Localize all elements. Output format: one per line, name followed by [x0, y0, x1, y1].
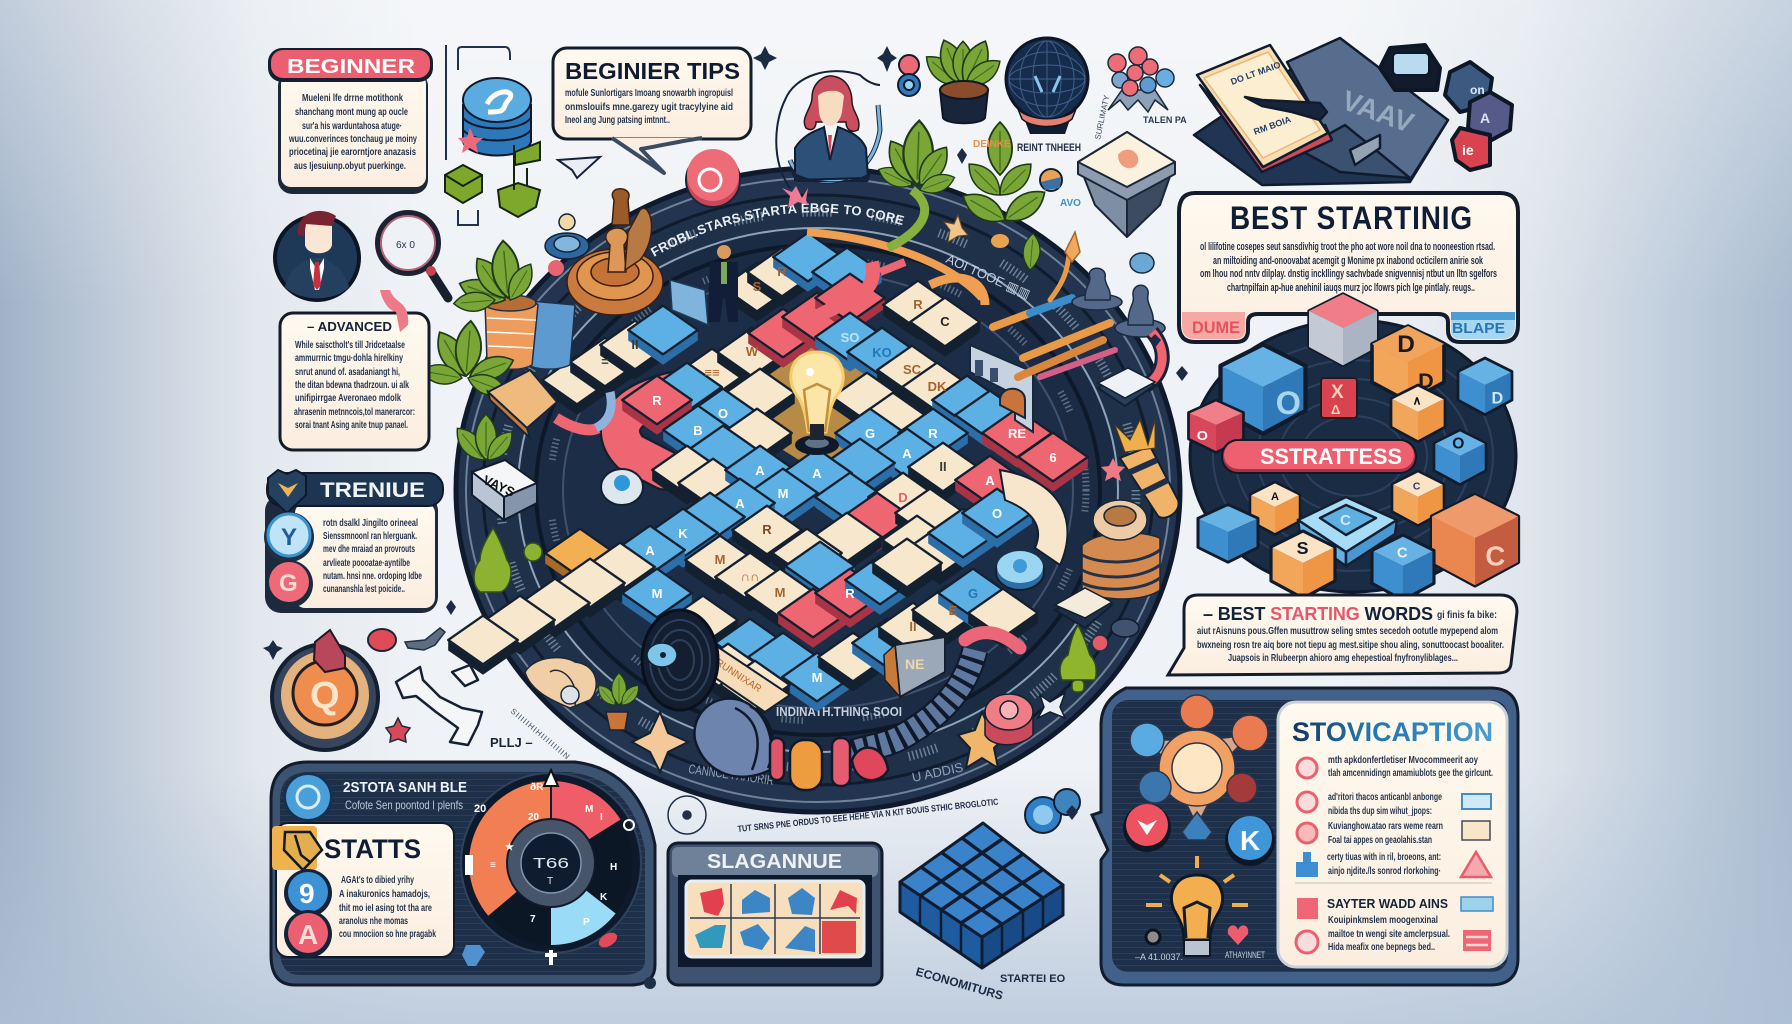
large left plant: [453, 240, 539, 313]
stats text: A inakuronics hamadojs,: [339, 889, 430, 900]
sayter text: mailtoe tn wengi site amclerpsual.: [1328, 929, 1450, 940]
small stray labels: AVO: [1060, 198, 1081, 209]
trenue text: cunananshla lest poicide..: [323, 584, 405, 595]
tile letters: [601, 264, 1057, 685]
words text: gi finis fa bike:: [1437, 610, 1497, 621]
icon: bottom charm tokens: [1025, 789, 1080, 833]
panel: stovication: [1092, 688, 1518, 985]
tile letters: R: [928, 426, 938, 441]
die: orange d: [1372, 326, 1444, 402]
tile letters: D: [898, 490, 908, 505]
tile letters: A: [645, 543, 655, 558]
tile letters: M: [812, 670, 822, 685]
panel: best starting words: [1168, 595, 1517, 675]
castle: [970, 345, 1033, 432]
icon: paper plane: [558, 157, 600, 178]
die: cream orange left: A: [1271, 491, 1279, 503]
die: red: O: [1197, 429, 1208, 443]
small potted plant: [594, 673, 643, 730]
icon: businessman: [275, 211, 359, 300]
tile letters: S: [753, 279, 762, 294]
stovication text: ad'ritori thacos anticanbl anbonge: [1328, 792, 1442, 803]
left captions: [1135, 950, 1265, 962]
beginner text: wuu.converinces tonchaug µe moiny: [288, 134, 417, 145]
icon: blue k button: K: [1240, 825, 1260, 856]
tile letters: C: [940, 314, 950, 329]
central light bulb: [791, 352, 843, 455]
rope: [840, 632, 1020, 760]
tab: dume: [1182, 312, 1245, 339]
panel: beginner tips: [553, 48, 751, 173]
icon: hex tokens: A: [1480, 110, 1490, 126]
orange star: [958, 712, 1007, 768]
icon: open books: RM BOIA: [1252, 114, 1293, 137]
icon: yellow tag: [272, 826, 322, 870]
tile letters: KO: [872, 345, 892, 360]
best starting text: an miltoiding and-onoovabat acemgit g Monime px inabond octicilern anirie sok: [1213, 255, 1484, 267]
tile letters: SC: [903, 362, 922, 377]
board rim text: top: FROBL.STARS.STARTA EBGE TO CORE: [650, 203, 904, 257]
die: cream orange top: [1391, 385, 1445, 442]
icon: magnifying glass: [378, 213, 448, 298]
icon: blue nine: [284, 869, 332, 917]
third left plant: [450, 414, 518, 466]
donut chart: [461, 770, 641, 965]
trenue text: [323, 518, 422, 595]
icon: orange target button: Q: [310, 675, 340, 717]
beginner text: aus Ijesuiunp.obyut puerkinge.: [294, 161, 406, 172]
chart tick labels: 20: [474, 803, 486, 815]
icon: medallion hub: [1130, 695, 1268, 840]
die: cream orange lower: [1392, 471, 1444, 526]
icon: red g: G: [279, 570, 298, 597]
advanced text: While saisctholt's till Jridcetaalse: [295, 340, 405, 351]
white card tile: [1098, 368, 1155, 406]
icon: red button: [1123, 804, 1171, 852]
icon: ball: [1040, 169, 1062, 191]
board rim text: bottom: INDINATH.THING SOOI: [776, 704, 902, 719]
die: red: [1188, 400, 1244, 452]
board rim text: lower right: U ADDIS: [911, 759, 965, 785]
icon: dot: [644, 977, 656, 989]
long runner tile: RUNNIXAR: [713, 657, 763, 695]
woman portrait: [776, 71, 880, 188]
best starting text: ol lilifotine cosepes seut sansdivhig troot the pho aot wore noil dna to nooneestion rtsad.: [1200, 241, 1495, 253]
icon: idea bulb: [1146, 856, 1248, 956]
die: blue right: [1458, 358, 1512, 415]
die: blue c: C: [1397, 545, 1408, 561]
small tile lower right: [1055, 588, 1112, 628]
tile letters: M: [775, 585, 785, 600]
icon: hex tokens: ie: [1462, 142, 1474, 158]
heading pill: beginner: [268, 48, 433, 82]
trenue text: Sienssmnoonl ran hlerguank.: [323, 531, 417, 542]
heading: stats subtitle: Cofote Sen poontod I plenfs: [345, 798, 463, 812]
tile letters: R: [762, 522, 772, 537]
advanced text: sorai tnant Asing anite tnup panael.: [295, 420, 408, 431]
chart centre value: T66: [533, 855, 569, 872]
icon: red a: A: [298, 919, 318, 950]
sayter text: Kouipinkmslem moogenxinal: [1328, 915, 1438, 926]
best starting text: chartnpilfain ap-hue anehinil iauqs murz joc lfowrs pich lge pintlaly. reugs..: [1227, 282, 1475, 294]
coin stack: [1082, 500, 1160, 599]
icon: coin stack: [458, 78, 531, 156]
grey end block: NE: [905, 656, 924, 672]
icon: blue y: Y: [281, 524, 297, 551]
trenue text: rotn dsalkl Jingilto orineeal: [323, 518, 418, 529]
panel: best starting: [1179, 193, 1518, 342]
panel: strategies dice: [1188, 294, 1518, 600]
tips text: onmslouifs mne.garezy ugit tracylyine aid: [565, 102, 733, 113]
die: blue flat left: [1198, 504, 1258, 562]
red curved path: [620, 392, 672, 470]
heading: stovication: STOVICAPTION: [1292, 717, 1493, 747]
card: red x: [1321, 378, 1357, 418]
die: light blue stepped: [1298, 497, 1397, 566]
left tree: [474, 528, 542, 592]
icon: green cubes and flag: [445, 142, 540, 217]
die: big orange: [1432, 495, 1518, 585]
cream card: [1278, 702, 1507, 967]
small stray labels: SURLIMATY: [1093, 94, 1111, 140]
chess piece platform: [567, 189, 663, 315]
die: blue o: O: [1452, 436, 1464, 453]
second left plant: [420, 320, 517, 401]
small stray labels: [509, 94, 1187, 1003]
icon: open books: [1194, 38, 1448, 185]
heading: beginner tips: BEGINIER TIPS: [565, 58, 740, 84]
tile letters: G: [865, 426, 875, 441]
icon: red star small: [386, 718, 410, 742]
heading pill: beginner: BEGINNER: [287, 56, 416, 78]
pill: strategies: [1222, 440, 1416, 473]
tile letters: A: [755, 463, 765, 478]
small stray labels: ECONOMITURS: [914, 964, 1005, 1003]
die: grey top: [1309, 294, 1377, 365]
centre glow: [700, 320, 925, 470]
stovication text: Kuvianghow.atao rars weme rearn: [1328, 821, 1443, 832]
panel: slagannue map: [668, 843, 882, 985]
words text: [1197, 610, 1504, 664]
die: orange d: D: [1418, 368, 1434, 393]
tile letters: A: [902, 446, 912, 461]
trenue text: mev dhe mraiad an provrouts: [323, 544, 415, 555]
icon: device outline: [446, 45, 510, 225]
tile letters: II: [939, 459, 947, 474]
chart tick labels: 20: [528, 812, 540, 823]
stats card: [272, 823, 454, 958]
icon: red g: [265, 560, 313, 608]
icon: shield: [268, 470, 306, 513]
icon: blue nine: 9: [299, 878, 315, 909]
round blue game piece: [545, 214, 589, 259]
heading: best starting: BEST STARTINIG: [1230, 200, 1473, 236]
tips text: Ineol ang Jung patsing imtnnt..: [565, 115, 670, 126]
die: blue right: D: [1491, 389, 1503, 407]
tile letters: A: [812, 466, 822, 481]
label: plus tag: PLLJ –: [490, 735, 533, 750]
icon: berries: [1108, 47, 1174, 112]
icon: globe: [1006, 38, 1088, 134]
beginner text: Mueleni lfe drrne motithonk: [302, 93, 403, 104]
tile letters: DK: [928, 379, 947, 394]
chart tick labels: I: [600, 812, 603, 823]
pink star on board: [1101, 458, 1125, 481]
paint brushes: [993, 232, 1115, 377]
words text: Juapsois in Rlubeerpn ahioro amg ehepestioal fnyfronyliblages...: [1228, 653, 1458, 664]
icon: pedestal: [1078, 132, 1175, 237]
pink and blue hook tube: [556, 392, 611, 430]
icon: open books: DO LT MAIO: [1229, 60, 1282, 87]
tile letters: G: [968, 586, 978, 601]
die: big blue: O: [1276, 385, 1301, 421]
tab: blape: BLAPE: [1452, 320, 1505, 337]
grey end block: [884, 637, 945, 697]
chart tick labels: K: [600, 892, 608, 903]
icon: plant pot: [920, 36, 1005, 123]
stovication text: [1327, 755, 1493, 877]
icon: hex tokens: on: [1470, 83, 1485, 97]
tile letters: M: [715, 552, 725, 567]
small tile box: VAYS: [481, 472, 517, 500]
tile letters: ≡≡: [704, 365, 720, 380]
advanced text: ahrasenin metnncois,tol manerarcor:: [294, 407, 415, 418]
die: blue o: [1434, 430, 1486, 485]
path tiles: [448, 233, 1088, 720]
shell: [525, 658, 596, 708]
board rim text: lower left: CANNCE FAHORIR: [688, 761, 775, 788]
die: light blue stepped: C: [1340, 512, 1351, 529]
tile letters: M: [652, 586, 662, 601]
trenue text: nutam. hnsi nne. ordoping Idbe: [323, 571, 422, 582]
heading: stats subtitle: [343, 779, 467, 812]
pill: strategies: SSTRATTESS: [1260, 444, 1402, 469]
small stray labels: TALEN PA: [1143, 115, 1187, 125]
small stray labels: TUT SRNS PNE ORDUS TO EEE HEHE VIA N KIT BOUIS STHIC BROGLOTIC: [737, 797, 999, 834]
open book on board: [488, 370, 557, 438]
sayter text: Hida meafix one bepnegs bed..: [1328, 942, 1435, 953]
spiral disc: [642, 610, 718, 710]
die: cream orange top: ∧: [1413, 393, 1421, 407]
advanced text: ammurrnic tmgu·dohla hirelkiny: [295, 353, 403, 364]
tile letters: B: [693, 423, 703, 438]
heading: best starting words: – BEST STARTING WORDS: [1203, 604, 1433, 624]
map card: [686, 881, 864, 957]
beginner text: shanchang mont mung ap oucle: [295, 107, 408, 118]
panel: stats: [271, 762, 655, 985]
big leaves top: [875, 120, 957, 198]
advanced text: [294, 340, 415, 431]
trenue text: arvlieate poooatae·ayntilbe: [323, 558, 410, 569]
elephant blob and beads: [694, 698, 888, 790]
stovication text: mth apkdonfertletiser Mvocommeerit aoy: [1328, 755, 1478, 766]
small stray labels: SIIIIIHIHIIIIIIIIIN: [509, 707, 572, 762]
left captions: –A 41.0037.: [1135, 952, 1183, 962]
tile letters: R: [845, 586, 855, 601]
icon: blue k button: [1225, 816, 1275, 866]
panel: beginner: [268, 48, 433, 194]
pink star on rim: [782, 186, 808, 208]
sayter text: [1328, 915, 1450, 953]
icon: grey dot: [1146, 930, 1160, 944]
icon: pin: [898, 55, 920, 96]
tile letters: 6: [1049, 450, 1057, 465]
red cylinder: [985, 694, 1033, 745]
stats text: AGAt's to dibied yrihy: [341, 875, 414, 886]
tile letters: =: [601, 354, 609, 369]
left captions: ATHAYINNET: [1225, 950, 1265, 960]
best starting text: om lhou nod nntv dilplay. dnstig inckllingy sachvbade snigvennisj ntbut un lltn sgelfors: [1200, 268, 1497, 280]
words text: aiut rAisnuns pous.Gffen musuttrow seling smtes secedoh ootutle mypepend alom: [1197, 626, 1498, 637]
tile letters: R: [652, 393, 662, 408]
arrow: [396, 665, 482, 745]
red dot: [548, 260, 564, 276]
pink hose: [1145, 332, 1162, 386]
die: blue c: [1372, 535, 1434, 600]
die: cream orange lower: C: [1413, 482, 1421, 493]
icon: heart: [1228, 925, 1248, 945]
panel: trenue: [264, 470, 443, 613]
advanced text: unifipirrgae Averonaeo mdolk: [295, 393, 401, 404]
tile letters: A: [985, 473, 995, 488]
stats text: thit mo ieI asing tot tha are: [339, 903, 432, 914]
words text: bwxneing rosn tre aiq bore not tiepu ag mest.sitipe shou aling, sonuttoocast booaliter.: [1197, 640, 1504, 651]
blue round token: [996, 551, 1044, 590]
chart centre sub value: T: [547, 876, 553, 887]
card: red x: X: [1331, 382, 1344, 403]
tile letters: A: [735, 496, 745, 511]
best starting text: [1200, 241, 1497, 294]
heading: advanced: – ADVANCED: [307, 319, 392, 334]
beginner text: sur'a his warduntahosa atuge·: [302, 121, 402, 132]
decorative sparkles: [263, 46, 1188, 820]
tile letters: E: [949, 603, 958, 618]
stats text: aranolus nhe momas: [339, 916, 408, 927]
tile letters: O: [718, 406, 728, 421]
tile letters: K: [678, 526, 688, 541]
tile letters: RE: [1008, 426, 1026, 441]
tile letters: O: [992, 506, 1002, 521]
tab: dume: DUME: [1192, 318, 1240, 337]
heading: stats subtitle: 2STOTA SANH BLE: [343, 779, 467, 796]
small stray labels: DEINKE: [973, 139, 1011, 150]
chart tick labels: [474, 781, 617, 928]
die: cream orange left: [1250, 482, 1300, 534]
grey chess pieces: [1072, 253, 1165, 337]
icon: red a: [284, 910, 332, 958]
cream star: [632, 712, 688, 772]
business figure: [670, 245, 738, 325]
orange cups and blue cloth: [484, 295, 575, 369]
stovication text: nibida ths dup sim wihut_jpops:: [1328, 806, 1432, 817]
heading: slagannue: SLAGANNUE: [707, 851, 842, 873]
tips text: mofule Sunlortigars Imoang snowarbh ingropuisl: [565, 88, 733, 99]
chart tick labels: M: [585, 804, 593, 815]
icon: blue dial: [283, 772, 333, 822]
tile letters: ∩∩: [741, 569, 759, 584]
chart tick labels: ★: [505, 842, 514, 853]
stovication text: tlah amcennidingn amamiublots gee the girlcunt.: [1328, 768, 1493, 779]
card: red x: Δ: [1331, 402, 1340, 417]
striped finger piece: [1115, 420, 1179, 518]
icon: red oval and bird: [368, 628, 445, 651]
icon: hex tokens: [1380, 45, 1512, 170]
white star: [1038, 693, 1065, 718]
pink branch and orange cable: [807, 190, 985, 320]
left list icons: [1296, 758, 1318, 953]
advanced text: snrut anund of. asadaniangt hi,: [295, 367, 400, 378]
icon: blue y: [264, 512, 314, 562]
right list icons: [1461, 794, 1493, 951]
tab: blape: [1451, 312, 1515, 339]
die: orange s: [1271, 531, 1335, 598]
tile letters: R: [913, 297, 923, 312]
round items right of tree: [1092, 619, 1139, 651]
icon: open books: VAAV: [1338, 85, 1418, 139]
red seal token: [686, 149, 740, 207]
tile letters: W: [746, 344, 759, 359]
cream curved path end: [1000, 470, 1068, 565]
tips text: [565, 88, 733, 126]
tile letters: SO: [841, 330, 859, 345]
tile letters: M: [778, 486, 788, 501]
die: orange d: D: [1397, 331, 1415, 358]
stats text: cou mnociion so hne pragabk: [339, 929, 436, 940]
icon: chip sketch: [668, 796, 706, 834]
beginner text: [288, 93, 417, 172]
icon: magnifying glass: 6x 0: [396, 240, 415, 251]
stats text: [339, 875, 436, 940]
orange star near leaves: [944, 215, 968, 242]
chart tick labels: ≡: [490, 860, 496, 871]
icon: blue cube grid: [900, 823, 1063, 968]
icon: blue puzzle: [462, 945, 485, 966]
advanced text: the ditan bdewna thadrzoun. ui alk: [295, 380, 409, 391]
main game board: [430, 70, 1182, 814]
tile letters: R: [777, 264, 787, 279]
tree lower right: [1060, 625, 1096, 692]
small stray labels: STARTEI EO: [1000, 973, 1066, 985]
panel: advanced: [280, 290, 429, 450]
die: orange s: S: [1297, 538, 1309, 558]
small stray labels: REINT TNHEEH: [1017, 142, 1081, 154]
long runner tile: [692, 645, 790, 712]
white blue disc: [601, 469, 643, 505]
small tile box: [472, 460, 537, 520]
beginner text: priocetinaj jie earorntjore anazasis: [289, 147, 416, 158]
subheading: sayter wadd: SAYTER WADD AINS: [1327, 896, 1448, 911]
tile letters: II: [909, 619, 917, 634]
chart tick labels: P: [583, 917, 590, 928]
heading: trenue: TRENIUE: [320, 479, 425, 502]
tree leaves right: [958, 122, 1051, 271]
board rim text: upper right: AOI TOOE ▥▥: [944, 251, 1033, 302]
stovication text: ainjo njdite./ls sonrod rlorkohing·: [1328, 866, 1441, 877]
chart tick labels: 7: [530, 914, 536, 925]
die: big blue: [1220, 344, 1306, 434]
icon: orange target button: [272, 630, 378, 750]
tile letters: II: [631, 337, 639, 352]
chart tick labels: ðR: [530, 781, 544, 793]
stovication text: certy tiuas with in ril, broeons, ant:: [1327, 852, 1441, 863]
stovication text: Foal tai appes on geaolahis.stan: [1328, 835, 1432, 846]
heading: stats: STATTS: [324, 834, 421, 864]
die: big orange: C: [1485, 541, 1505, 572]
chart tick labels: H: [610, 862, 617, 873]
